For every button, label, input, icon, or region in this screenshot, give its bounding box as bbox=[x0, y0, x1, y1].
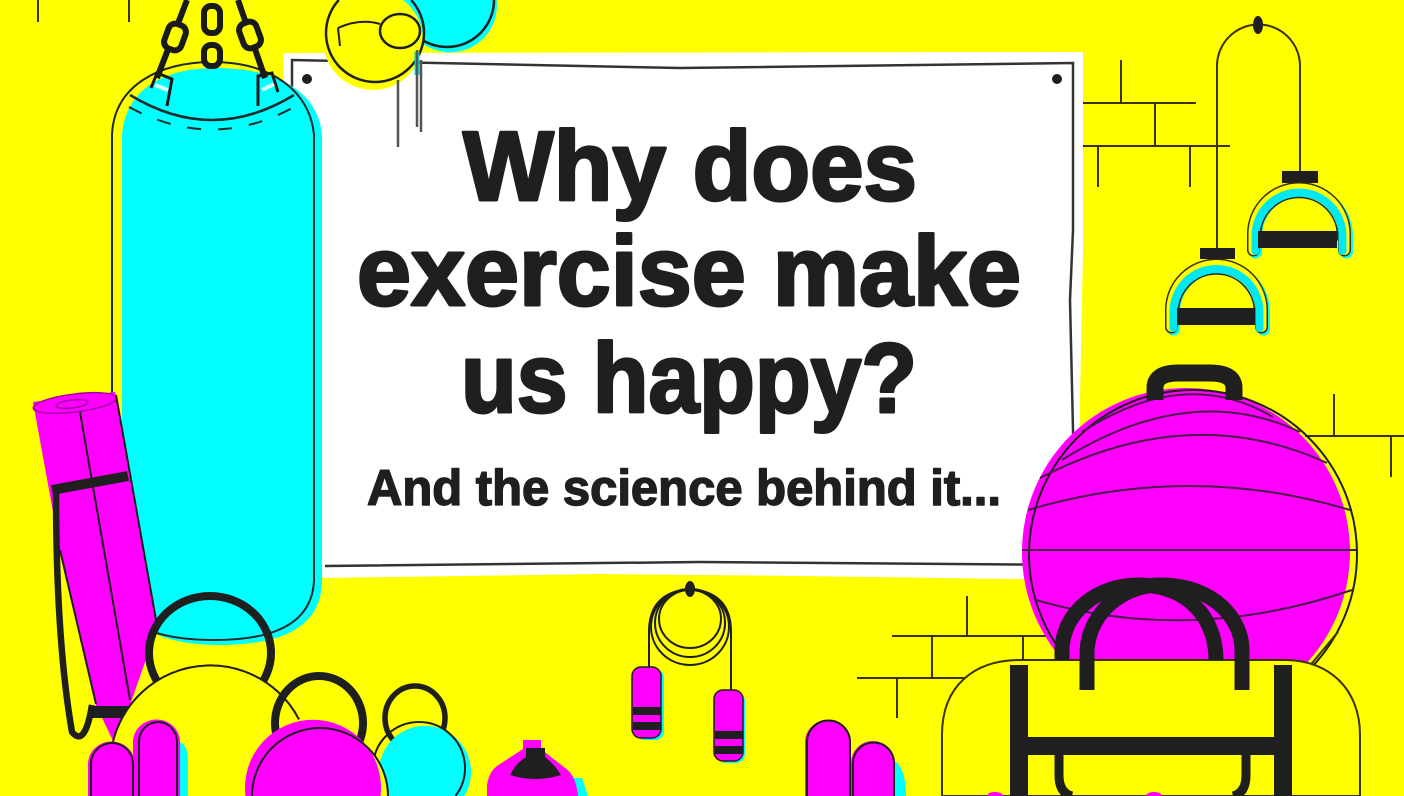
dumbbell grips right bbox=[805, 720, 906, 796]
hanging chains bbox=[151, 0, 278, 106]
exercise ball bbox=[1022, 373, 1358, 718]
dumbbell grips left bbox=[88, 720, 188, 796]
kettlebell cyan bbox=[373, 686, 471, 796]
resistance handles on rope bbox=[1172, 16, 1346, 329]
wall bricks right bbox=[1305, 394, 1404, 477]
yoga mat bbox=[32, 389, 158, 745]
title: us happy? bbox=[461, 323, 917, 433]
title bbox=[357, 111, 1021, 433]
kettlebell large yellow bbox=[110, 596, 310, 796]
wall bricks lower bbox=[857, 596, 1050, 718]
boxing gloves bbox=[323, 0, 497, 147]
skipping rope bbox=[632, 581, 745, 763]
title: exercise make bbox=[357, 216, 1021, 326]
title: Why does bbox=[463, 111, 917, 221]
kettlebell magenta bbox=[245, 676, 388, 796]
gym bag bbox=[942, 585, 1360, 796]
wall bricks upper right bbox=[1080, 60, 1230, 187]
water bottle bbox=[487, 740, 588, 796]
sign banner bbox=[283, 52, 1083, 580]
punching bag bbox=[112, 62, 322, 645]
subtitle: And the science behind it... bbox=[367, 460, 1001, 516]
wall bricks top left ticks bbox=[38, 0, 129, 22]
